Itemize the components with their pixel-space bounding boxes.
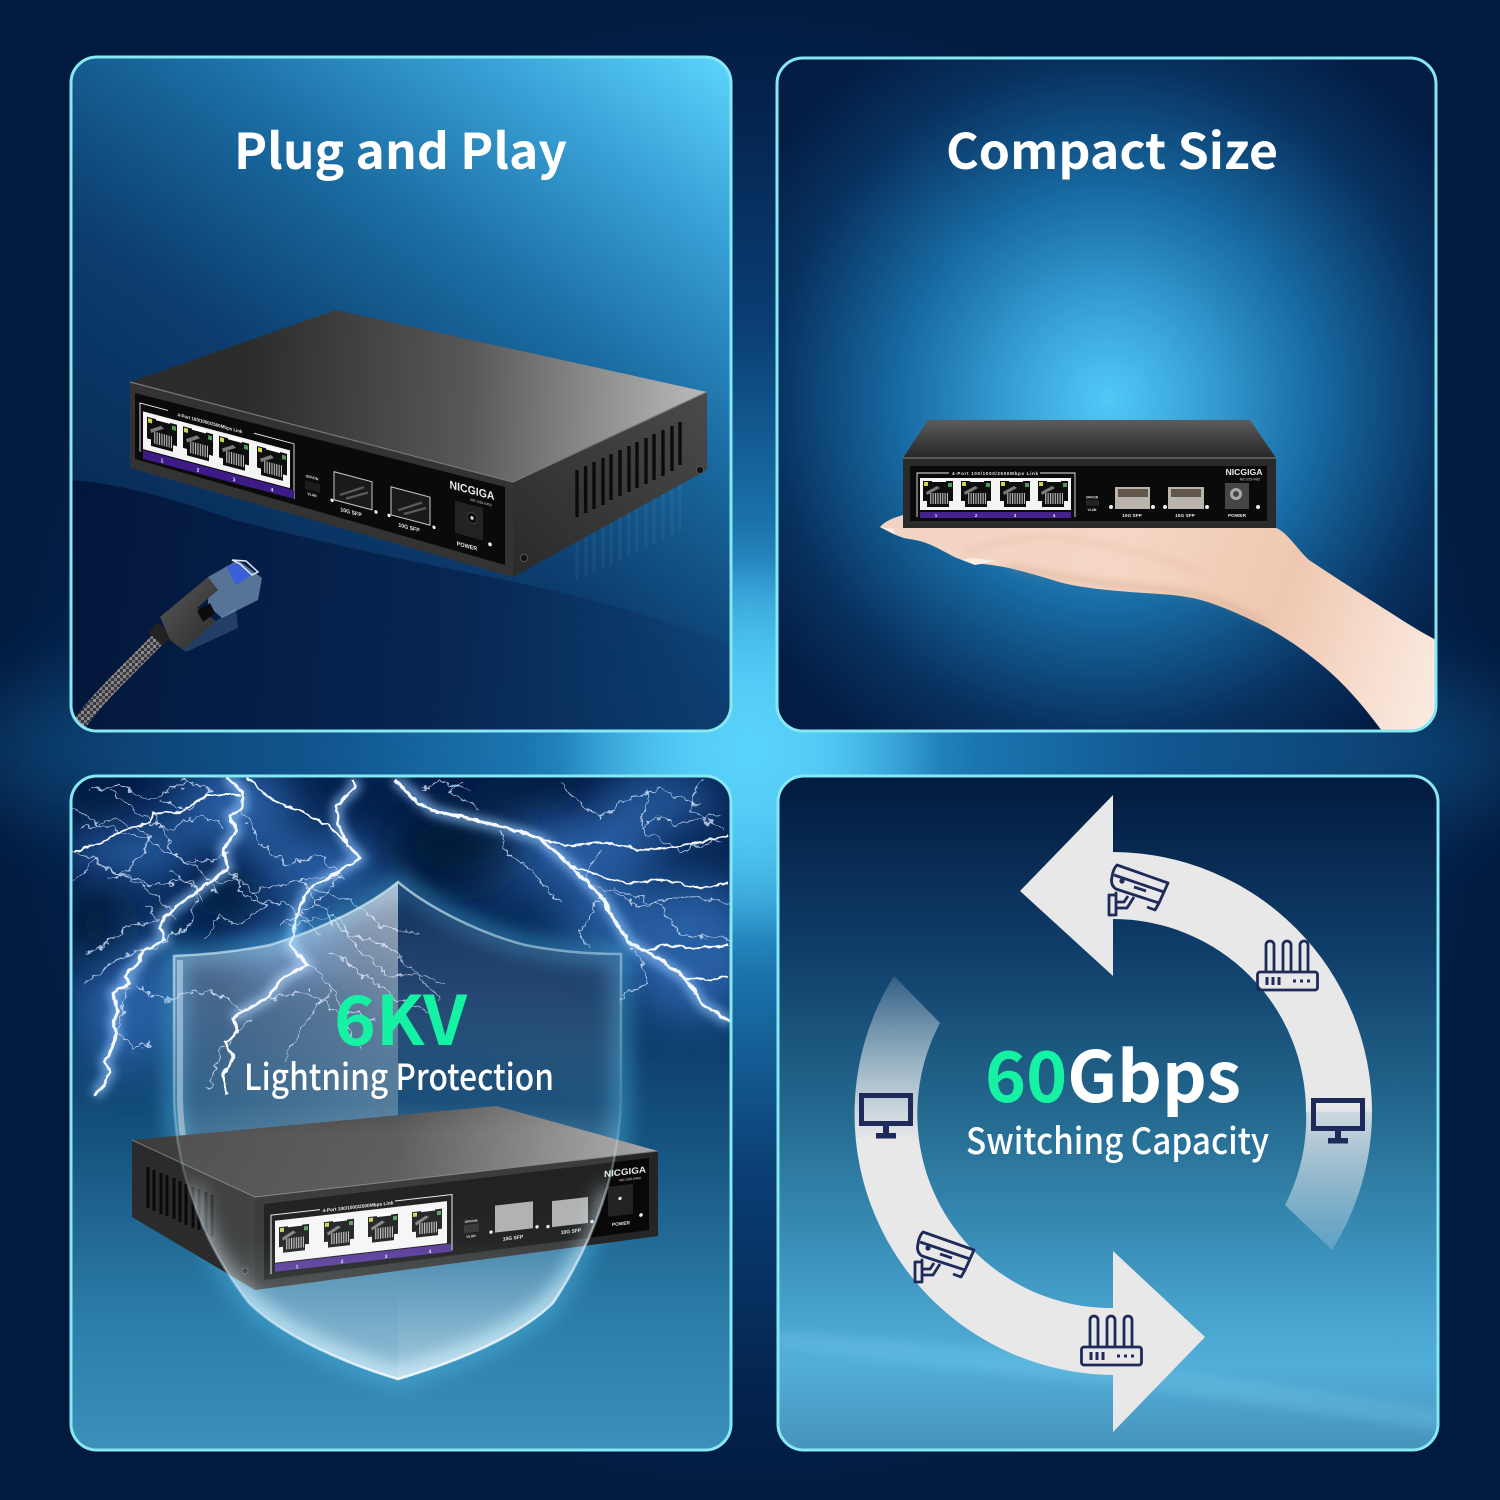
panel border <box>71 57 731 731</box>
VLAN switch: OFF/ON <box>1086 496 1099 500</box>
power jack <box>455 501 492 557</box>
port block: 4-Port 100/1000/2500Mbps Link <box>952 471 1038 476</box>
panel border <box>777 58 1436 731</box>
shield overlay on switch <box>170 1100 625 1385</box>
port block <box>271 1194 452 1274</box>
port block: 2 <box>197 467 199 474</box>
vents <box>577 422 680 517</box>
shield <box>174 882 621 1379</box>
panel: lightning protection <box>65 760 760 1451</box>
port block: 4 <box>429 1249 432 1255</box>
icon: ethernet cable <box>78 560 262 726</box>
lightning bolts <box>74 777 730 1095</box>
VLAN switch <box>305 474 320 499</box>
port block: 2 <box>975 513 978 518</box>
text: Switching Capacity: Switching Capacity <box>966 1113 1269 1165</box>
hand <box>880 515 1440 735</box>
product: switch front 3/4 view: 10G SFP <box>340 507 362 519</box>
product: switch held on palm: NIC-S25-0402 <box>1240 478 1260 482</box>
icon: monitor left <box>859 1093 913 1138</box>
VLAN switch: VLAN <box>466 1234 476 1239</box>
arrow: upper cycle tail <box>1285 1108 1372 1250</box>
product: switch held on palm: NICGIGA <box>1226 467 1262 477</box>
port block: 4 <box>1053 513 1056 518</box>
product: switch behind shield: NIC-S25-0402 <box>619 1176 641 1182</box>
port block: 1 <box>935 513 938 518</box>
product reflection <box>576 484 682 580</box>
product: switch behind shield: NICGIGA <box>604 1164 647 1179</box>
power jack: POWER <box>457 541 477 553</box>
product: switch front 3/4 view: 10G SFP <box>398 522 420 534</box>
power jack <box>1225 483 1260 519</box>
icon: camera bottom <box>915 1232 974 1282</box>
port block: 3 <box>385 1254 388 1260</box>
screws <box>520 466 704 562</box>
port block: 1 <box>161 458 163 465</box>
port block: 4 <box>271 487 273 494</box>
port block: 1 <box>296 1264 299 1270</box>
storm clouds <box>70 760 760 1070</box>
VLAN switch: OFF/ON <box>465 1219 478 1224</box>
icon: router top <box>1258 941 1318 990</box>
VLAN switch <box>1086 496 1099 512</box>
light streak <box>777 1330 1440 1430</box>
VLAN switch: OFF/ON <box>306 474 319 482</box>
product: switch front 3/4 view <box>130 310 707 577</box>
SFP ports <box>1109 487 1209 519</box>
port block: 2 <box>341 1259 344 1265</box>
lightning glow <box>95 777 730 1095</box>
arrow: upper cycle <box>1020 795 1372 1112</box>
SFP ports: 10G SFP <box>1122 513 1143 519</box>
vents <box>148 1167 212 1236</box>
front panel <box>135 393 505 565</box>
callout: 6KV: 6KV <box>334 966 468 1065</box>
port block <box>140 402 294 499</box>
panel: compact size <box>776 57 1440 735</box>
product: switch held on palm <box>903 420 1276 528</box>
power jack <box>608 1183 643 1229</box>
port block: 3 <box>1014 513 1017 518</box>
shield outline <box>174 882 621 1379</box>
panel border <box>778 776 1438 1450</box>
heading: Compact Size: Compact Size <box>946 113 1278 184</box>
SFP ports <box>489 1194 594 1244</box>
VLAN switch <box>464 1218 479 1239</box>
SFP ports: 10G SFP <box>503 1234 524 1243</box>
SFP ports <box>334 472 430 525</box>
port block: 4-Port 100/1000/2500Mbps Link <box>323 1200 394 1214</box>
product: switch front 3/4 view: NICGIGA <box>450 479 494 503</box>
fine branches <box>74 780 730 1090</box>
reflective surface <box>72 480 648 730</box>
text: Lightning Protection: Lightning Protection <box>244 1049 554 1101</box>
VLAN switch: VLAN <box>307 492 317 498</box>
port block: 4-Port 100/1000/2500Mbps Link <box>178 412 243 435</box>
callout: 60Gbps: 60Gbps <box>985 1022 1241 1123</box>
SFP ports: 10G SFP <box>561 1228 582 1236</box>
icon: router bottom <box>1082 1316 1142 1365</box>
product: switch behind shield <box>132 1106 658 1290</box>
icon: camera top <box>1109 865 1168 915</box>
port block <box>917 471 1075 518</box>
product: switch front 3/4 view: NIC-S25-0402 <box>470 498 492 508</box>
power jack: POWER <box>1228 513 1247 519</box>
VLAN switch: VLAN <box>1088 508 1097 512</box>
port block: 3 <box>233 477 235 484</box>
heading: Plug and Play: Plug and Play <box>234 113 567 184</box>
panel: switching capacity <box>777 775 1440 1451</box>
arrow: lower cycle <box>855 976 1205 1432</box>
panel border <box>71 776 731 1450</box>
power jack: POWER <box>612 1220 631 1228</box>
icon: monitor right <box>1311 1098 1365 1144</box>
nails <box>880 527 895 534</box>
SFP ports: 10G SFP <box>1175 513 1196 519</box>
panel: plug and play <box>70 56 732 732</box>
